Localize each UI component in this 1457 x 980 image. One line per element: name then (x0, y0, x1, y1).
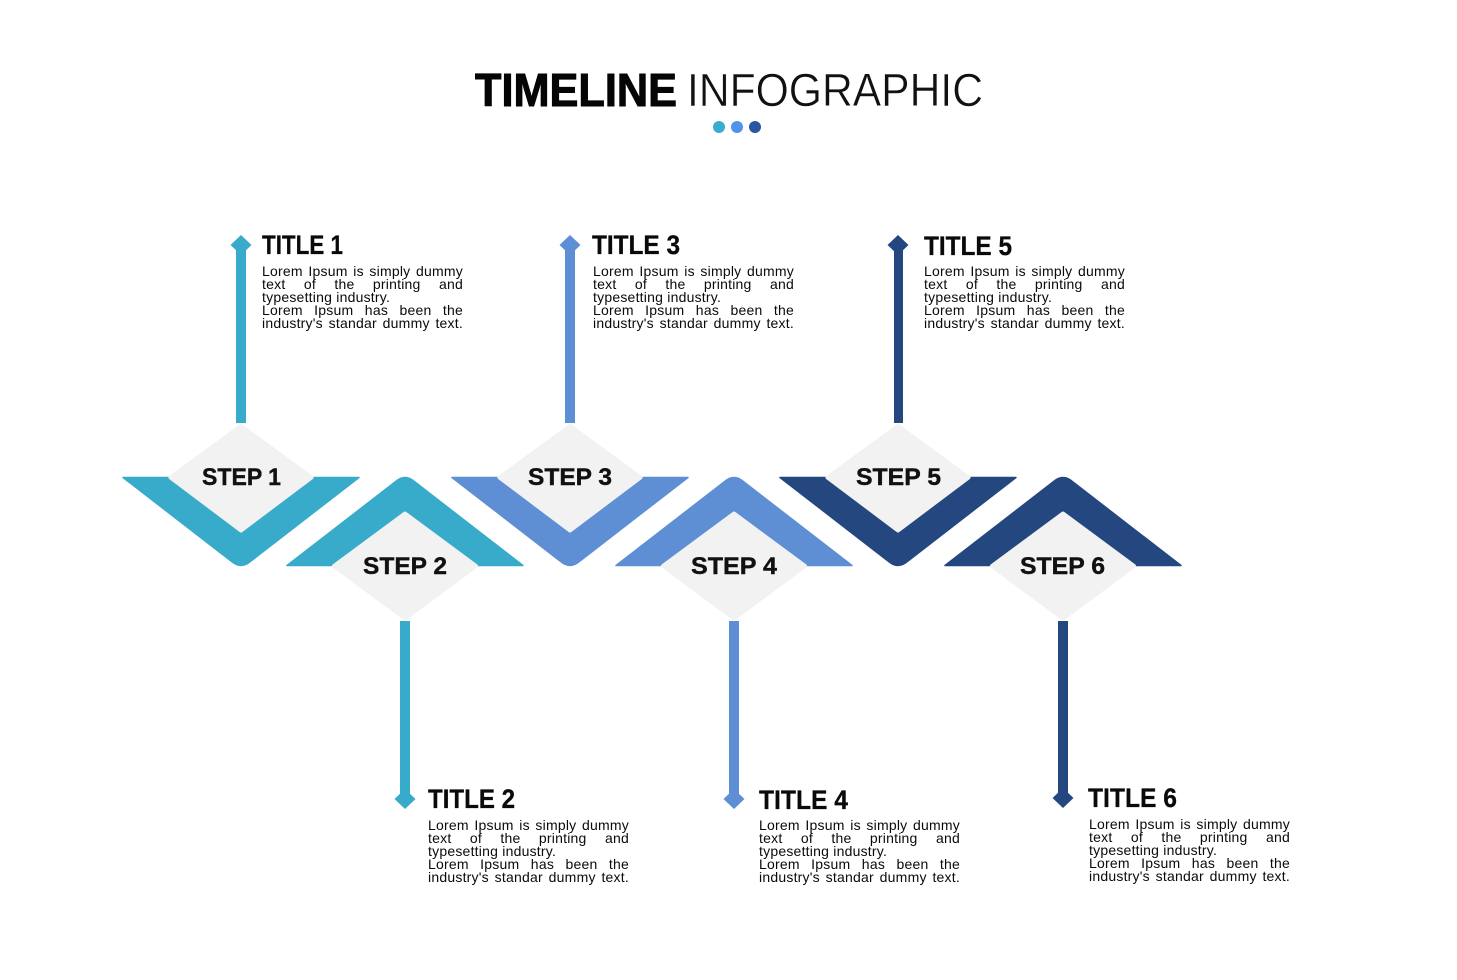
step 5 with pointer: STEP 5 (856, 464, 941, 491)
step 2 with pointer: STEP 2 (363, 553, 447, 580)
step 6 with pointer (945, 478, 1181, 808)
text block: title 5 body: Lorem Ipsum is simply dummy (924, 263, 1125, 279)
text block: title 6 body (1089, 816, 1290, 884)
text block: title 1 body: text of the printing and (262, 276, 463, 292)
title (475, 64, 983, 116)
step 4 with pointer (616, 478, 852, 809)
heading: title 3: TITLE 3 (592, 230, 680, 260)
step 3 with pointer: STEP 3 (528, 464, 612, 491)
text block: title 6 body: typesetting industry. (1089, 842, 1217, 858)
text block: title 2 body: Lorem Ipsum is simply dummy (428, 817, 629, 833)
text block: title 1 body: typesetting industry. (262, 289, 390, 305)
step 1 with pointer (123, 235, 359, 566)
step 6 with pointer: STEP 6 (1020, 553, 1105, 580)
step 2 with pointer (287, 478, 523, 809)
title: TIMELINE (475, 64, 677, 116)
text block: title 2 body (428, 817, 629, 885)
text block: title 1 body (262, 263, 463, 331)
text block: title 3 body: industry's standar dummy text. (593, 315, 794, 331)
text block: title 1 body: industry's standar dummy text. (262, 315, 463, 331)
step 4 with pointer: STEP 4 (691, 553, 778, 580)
text block: title 4 body: Lorem Ipsum has been the (759, 856, 960, 872)
title: INFOGRAPHIC (687, 64, 983, 116)
text block: title 6 body: industry's standar dummy text. (1089, 868, 1290, 884)
text block: title 4 body: Lorem Ipsum is simply dummy (759, 817, 960, 833)
step 1 with pointer: STEP 1 (202, 464, 281, 491)
text block: title 5 body: Lorem Ipsum has been the (924, 302, 1125, 318)
text block: title 5 body: industry's standar dummy text. (924, 315, 1125, 331)
heading: title 4: TITLE 4 (759, 785, 848, 815)
text block: title 3 body: typesetting industry. (593, 289, 721, 305)
text block: title 5 body (924, 263, 1125, 331)
text block: title 3 body: Lorem Ipsum has been the (593, 302, 794, 318)
text block: title 6 body: Lorem Ipsum has been the (1089, 855, 1290, 871)
heading: title 2: TITLE 2 (428, 784, 515, 814)
heading: title 6: TITLE 6 (1088, 783, 1177, 813)
text block: title 4 body: text of the printing and (759, 830, 960, 846)
text block: title 4 body: industry's standar dummy text. (759, 869, 960, 885)
text block: title 1 body: Lorem Ipsum has been the (262, 302, 463, 318)
title accent dots (713, 121, 761, 133)
text block: title 4 body (759, 817, 960, 885)
text block: title 3 body: text of the printing and (593, 276, 794, 292)
text block: title 2 body: text of the printing and (428, 830, 629, 846)
text block: title 3 body (593, 263, 794, 331)
text block: title 4 body: typesetting industry. (759, 843, 887, 859)
text block: title 1 body: Lorem Ipsum is simply dummy (262, 263, 463, 279)
text block: title 5 body: text of the printing and (924, 276, 1125, 292)
text block: title 6 body: Lorem Ipsum is simply dummy (1089, 816, 1290, 832)
heading: title 1: TITLE 1 (262, 230, 343, 260)
step 3 with pointer (452, 235, 688, 566)
text block: title 2 body: Lorem Ipsum has been the (428, 856, 629, 872)
text block: title 2 body: typesetting industry. (428, 843, 556, 859)
step 5 with pointer (780, 235, 1016, 566)
text block: title 3 body: Lorem Ipsum is simply dummy (593, 263, 794, 279)
text block: title 6 body: text of the printing and (1089, 829, 1290, 845)
text block: title 5 body: typesetting industry. (924, 289, 1052, 305)
heading: title 5: TITLE 5 (924, 231, 1012, 261)
text block: title 2 body: industry's standar dummy text. (428, 869, 629, 885)
